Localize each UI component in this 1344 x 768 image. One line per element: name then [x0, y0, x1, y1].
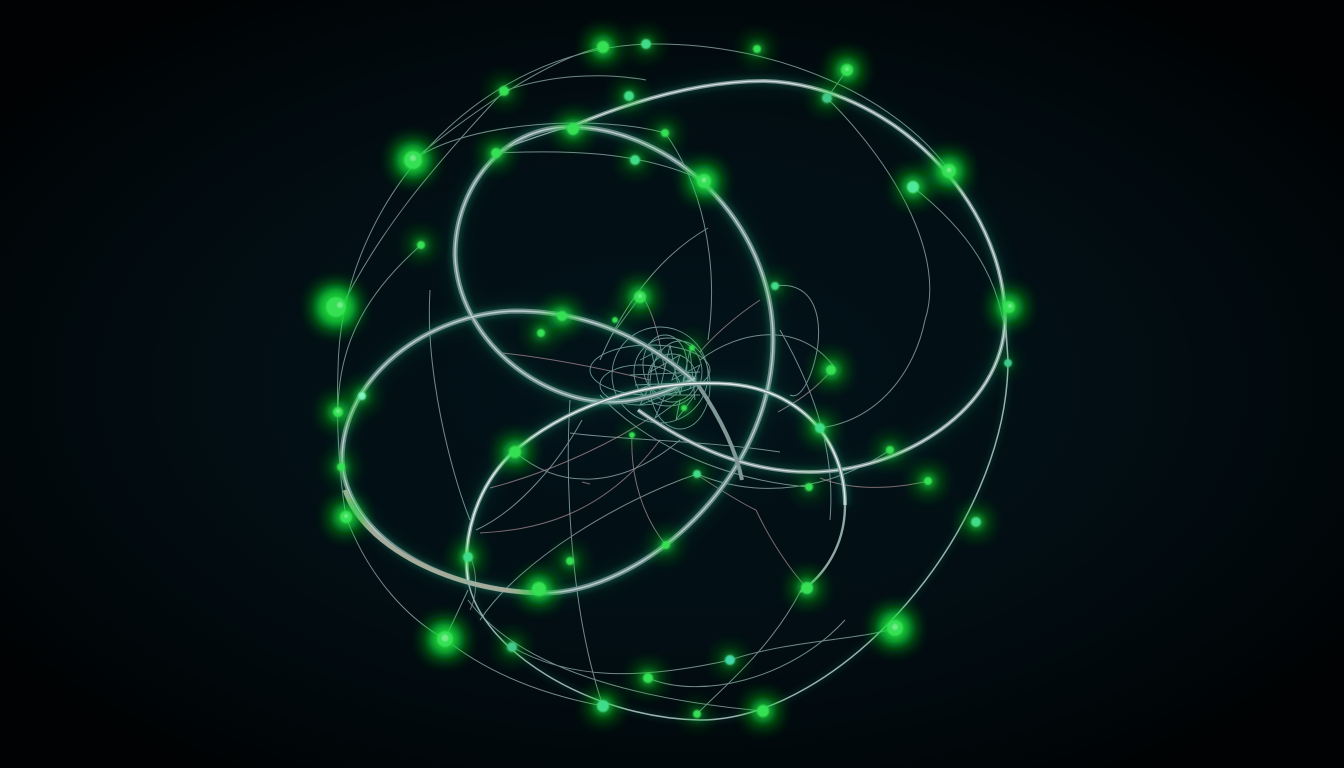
thin orbit lines: [337, 44, 1008, 714]
central tangle: [590, 327, 710, 429]
ring: large spiral loop: [342, 127, 773, 593]
ambient ring glow: [342, 81, 1005, 593]
ring: outer lower sweep: [468, 300, 1008, 720]
ring: lower loop: [467, 383, 845, 580]
green nodes: [326, 39, 1015, 718]
node highlights: [336, 67, 1012, 642]
faint pink filaments: [468, 300, 928, 610]
ring: upper right loop: [496, 81, 1005, 472]
node glow halos: [321, 39, 1018, 719]
